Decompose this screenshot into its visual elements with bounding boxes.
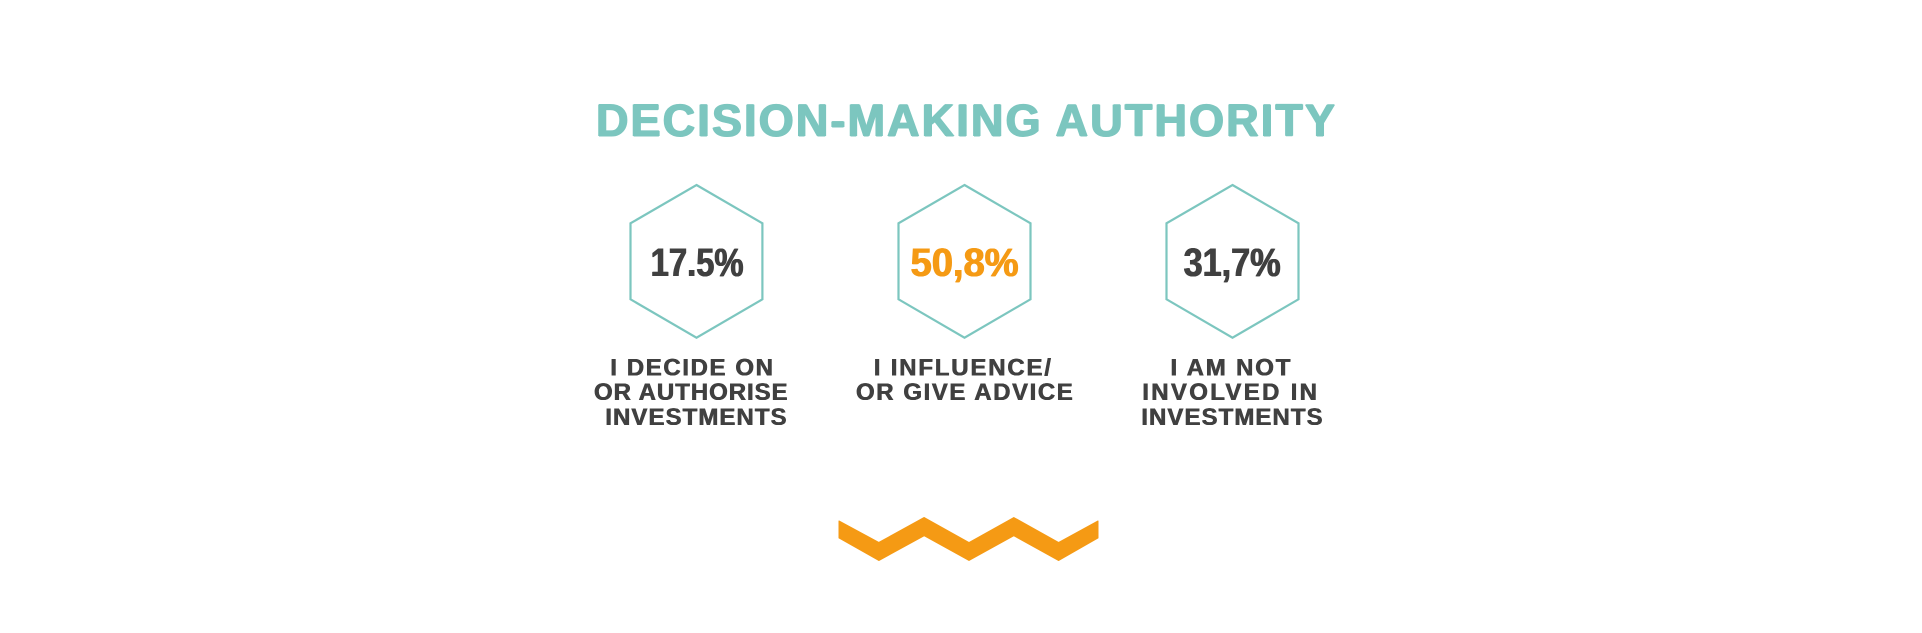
item: I influence or give advice — [856, 185, 1073, 406]
item: I am not involved in investments — [1141, 185, 1323, 431]
hexagon 1 — [630, 185, 762, 338]
orange zigzag ornament — [839, 518, 1098, 560]
title: DECISION-MAKING AUTHORITY — [596, 95, 1335, 146]
item: I decide on or authorise investments — [594, 185, 788, 431]
label 3 — [1141, 355, 1323, 431]
label 3: INVOLVED IN — [1142, 379, 1317, 406]
hexagon 3 — [1166, 185, 1298, 338]
label 2: OR GIVE ADVICE — [856, 379, 1073, 406]
label 2: I INFLUENCE/ — [874, 355, 1051, 382]
hexagon 2 — [898, 185, 1030, 338]
label 1 — [594, 355, 788, 431]
value 17.5%: 17.5% — [651, 241, 744, 285]
label 3: I AM NOT — [1170, 355, 1291, 382]
label 2 — [856, 355, 1073, 406]
value 31,7%: 31,7% — [1184, 241, 1281, 285]
label 3: INVESTMENTS — [1141, 404, 1323, 431]
label 1: OR AUTHORISE — [594, 379, 788, 406]
label 1: INVESTMENTS — [605, 404, 787, 431]
label 1: I DECIDE ON — [610, 355, 773, 382]
value 50,8%: 50,8% — [911, 241, 1019, 285]
